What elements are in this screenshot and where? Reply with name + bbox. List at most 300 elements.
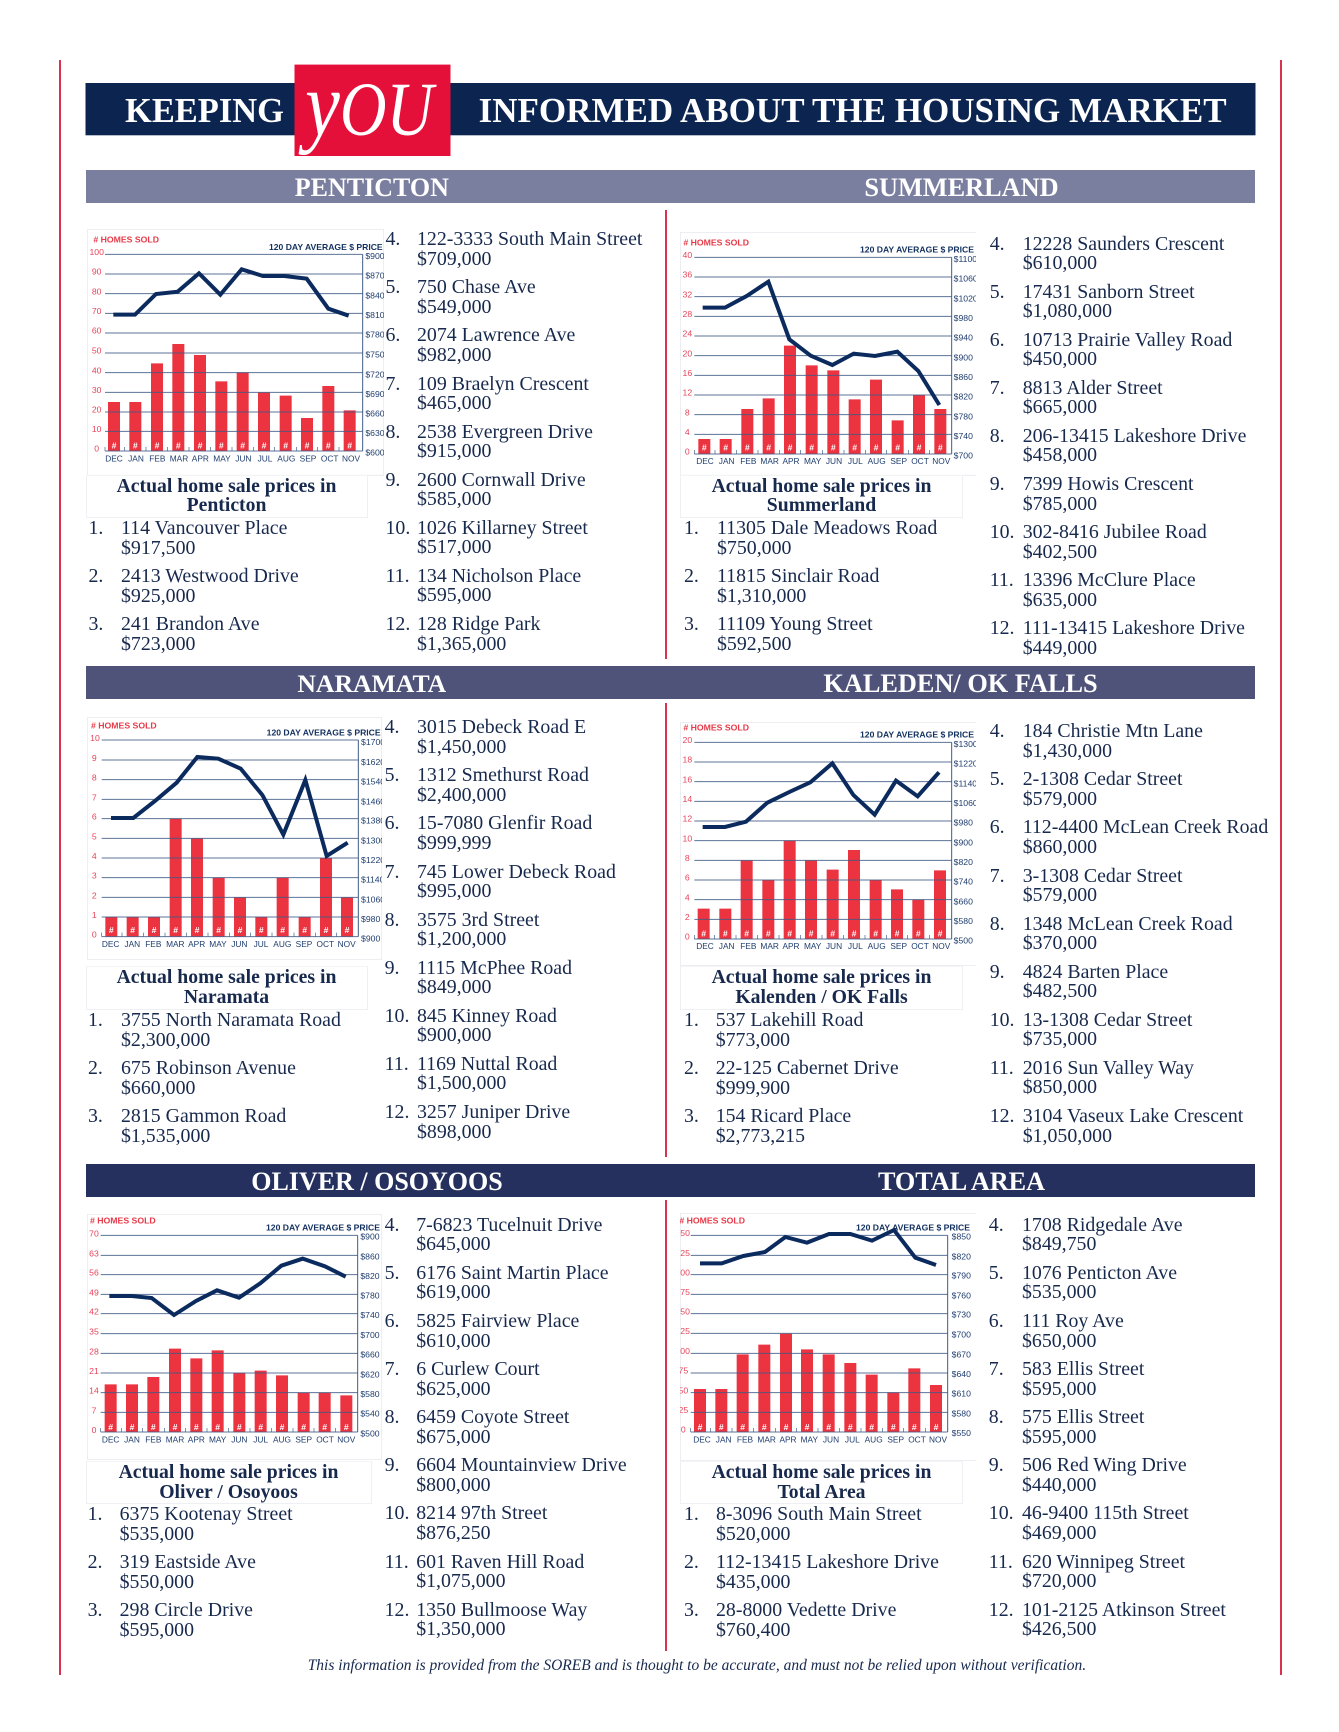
list: Summerland sales 1-3: $750,000 [717, 536, 791, 558]
chart: Penticton homes sold and average price: ############ [112, 441, 352, 451]
list: Naramata sales 4-12: 1312 Smethurst Road [417, 764, 589, 786]
month labels: JUN [826, 456, 842, 466]
subheading: Oliver prices: Oliver / Osoyoos [159, 1481, 298, 1503]
month labels: OCT [321, 453, 338, 463]
chart: Kaleden homes sold and average price [680, 722, 976, 966]
list: Penticton sales 4-12: $549,000 [417, 296, 491, 318]
subheading: Penticton prices: Actual home sale prices in [117, 475, 336, 497]
right axis: average price: $900 [361, 934, 380, 944]
subheading: Summerland prices: Summerland [767, 494, 876, 516]
list: Kaleden sales 4-12: 3-1308 Cedar Street [1023, 865, 1182, 887]
list: Summerland sales 1-3: 2. [684, 565, 699, 587]
left axis: homes sold: 28 [683, 309, 692, 319]
list: Summerland sales 4-12: 302-8416 Jubilee Road [1023, 521, 1207, 543]
list: Kaleden sales 4-12: 112-4400 McLean Creek Road [1023, 816, 1268, 838]
list: Oliver sales 1-3: $595,000 [120, 1619, 194, 1641]
list: Total Area sales 4-12: 111 Roy Ave [1022, 1310, 1124, 1332]
heading: Penticton: PENTICTON [295, 173, 449, 202]
list: Summerland sales 4-12: 5. [990, 281, 1005, 303]
month labels: AUG [277, 453, 295, 463]
bars: homes sold [698, 346, 946, 454]
right axis: average price: $790 [952, 1271, 971, 1281]
left axis: homes sold: 50 [92, 346, 102, 356]
right axis: average price: $580 [954, 916, 973, 926]
list: Summerland sales 4-12: 12. [990, 617, 1014, 639]
list: Oliver sales 4-12: 10. [385, 1502, 409, 1524]
right axis: average price: $610 [952, 1389, 971, 1399]
left axis: homes sold: 0 [681, 1425, 686, 1435]
list: Oliver sales 4-12: 5825 Fairview Place [416, 1310, 579, 1332]
list: Oliver sales 4-12: $1,350,000 [416, 1618, 505, 1640]
list: Summerland sales 4-12: $450,000 [1023, 348, 1097, 370]
list: Kaleden sales 1-3 [684, 1009, 899, 1147]
list: Penticton sales 4-12: 134 Nicholson Place [417, 565, 581, 587]
list: Summerland sales 1-3: 1. [684, 517, 699, 539]
left axis: homes sold: 7 [92, 1405, 97, 1415]
month labels: AUG [868, 456, 886, 466]
list: Summerland sales 1-3: 11815 Sinclair Road [717, 565, 879, 587]
panel: Total Area [680, 1213, 1226, 1641]
list: Naramata sales 4-12: 845 Kinney Road [417, 1005, 557, 1027]
list: Kaleden sales 4-12: 9. [990, 961, 1005, 983]
left axis: homes sold [675, 1228, 690, 1435]
list: Penticton sales 1-3 [88, 517, 299, 655]
right axis: average price: $780 [954, 411, 973, 421]
month labels: SEP [890, 456, 907, 466]
list: Naramata sales 4-12: $995,000 [417, 880, 491, 902]
list: Penticton sales 1-3: $925,000 [121, 585, 195, 607]
right axis: average price: $740 [954, 877, 973, 887]
list: Naramata sales 4-12: $849,000 [417, 976, 491, 998]
left axis: homes sold: 32 [683, 289, 692, 299]
list: Oliver sales 1-3: 1. [88, 1503, 102, 1525]
list: Penticton sales 4-12: 10. [386, 517, 410, 539]
list: Kaleden sales 4-12: $850,000 [1023, 1076, 1097, 1098]
month labels: AUG [865, 1434, 883, 1444]
heading: Total Area: TOTAL AREA [878, 1167, 1045, 1196]
list: Kaleden sales 1-3: 2. [684, 1057, 699, 1079]
chart: Oliver homes sold and average price [87, 1214, 382, 1460]
month labels: SEP [887, 1434, 904, 1444]
list: Summerland sales 4-12: 13396 McClure Place [1023, 569, 1196, 591]
month labels: SEP [295, 1434, 312, 1444]
chart: Penticton homes sold and average price [87, 229, 384, 476]
left axis: homes sold: 20 [683, 735, 692, 745]
bars: homes sold [698, 841, 946, 939]
month labels: MAR [166, 1434, 184, 1444]
month labels: NOV [342, 453, 360, 463]
month labels: JUN [826, 941, 842, 951]
right axis: average price: $700 [360, 1330, 380, 1340]
list: Kaleden sales 4-12: 4. [990, 720, 1005, 742]
left axis: homes sold: 20 [92, 405, 102, 415]
left axis: homes sold: 2 [92, 890, 97, 900]
subheading: Summerland prices [680, 475, 963, 518]
line: 120 day average price [111, 757, 348, 856]
left axis: homes sold: 16 [683, 368, 692, 378]
list: Oliver sales 4-12: $625,000 [416, 1378, 491, 1400]
month labels: JAN [128, 453, 144, 463]
list: Summerland sales 1-3: 11109 Young Street [717, 613, 873, 635]
month labels: JUN [231, 1434, 247, 1444]
list: Penticton sales 4-12: 2600 Cornwall Drive [417, 469, 586, 491]
bars: homes sold [105, 819, 353, 937]
list: Total Area sales 4-12: 10. [989, 1502, 1014, 1524]
left axis: homes sold: 8 [685, 407, 690, 417]
month labels: NOV [929, 1434, 947, 1444]
subheading: Kaleden prices: Kalenden / OK Falls [735, 986, 908, 1008]
axis title: average price: 120 DAY AVERAGE $ PRICE [860, 245, 974, 255]
list: Summerland sales 4-12: 8813 Alder Street [1023, 377, 1163, 399]
list: Naramata sales 4-12: 3575 3rd Street [417, 909, 539, 931]
month labels: NOV [932, 456, 951, 466]
left axis: homes sold: 6 [685, 873, 690, 883]
red rule: left margin [58, 60, 61, 1675]
month labels: APR [188, 1434, 205, 1444]
list: Penticton sales 4-12: 109 Braelyn Crescent [417, 373, 589, 395]
month labels: MAY [801, 1434, 818, 1444]
list: Total Area sales 4-12: $535,000 [1022, 1281, 1096, 1303]
left axis: homes sold: 12 [683, 814, 692, 824]
list: Oliver sales 4-12: 6604 Mountainview Drive [416, 1454, 627, 1476]
list: Oliver sales 4-12: 1350 Bullmoose Way [416, 1599, 587, 1621]
right axis: average price [954, 254, 978, 461]
list: Total Area sales 1-3: $520,000 [716, 1523, 790, 1545]
month labels: MAR [760, 456, 779, 466]
list: Naramata sales 1-3 [88, 1009, 341, 1147]
list: Kaleden sales 4-12: $1,050,000 [1023, 1125, 1112, 1147]
list: Summerland sales 4-12: 8. [990, 425, 1005, 447]
left axis: homes sold: 60 [92, 326, 102, 336]
list: Naramata sales 4-12: 11. [385, 1053, 409, 1075]
list: Summerland sales 4-12: 6. [990, 329, 1005, 351]
axis title: homes sold: # HOMES SOLD [93, 235, 159, 245]
left axis: homes sold: 0 [685, 447, 690, 457]
list: Summerland sales 1-3: $592,500 [717, 633, 791, 655]
month labels: MAY [209, 939, 227, 949]
list: Oliver sales 4-12: 6459 Coyote Street [416, 1406, 569, 1428]
left axis: homes sold [683, 735, 692, 942]
list: Total Area sales 4-12: 1076 Penticton Ave [1022, 1262, 1177, 1284]
list: Total Area sales 4-12: 8. [989, 1406, 1004, 1428]
red rule: right margin [1280, 60, 1282, 1675]
subheading: Oliver prices [86, 1461, 372, 1504]
list: Naramata sales 4-12: 9. [385, 957, 399, 979]
list: Summerland sales 4-12: $402,500 [1023, 541, 1097, 563]
month labels: FEB [149, 453, 166, 463]
month labels: SEP [300, 453, 317, 463]
right axis: average price: $500 [360, 1428, 380, 1438]
panel: Penticton [86, 228, 642, 655]
list: Naramata sales 4-12: 4. [385, 716, 399, 738]
subheading: Naramata prices: Naramata [184, 986, 269, 1008]
month labels: NOV [932, 941, 951, 951]
list: Summerland sales 4-12: $785,000 [1023, 493, 1097, 515]
list: Summerland sales 4-12: $449,000 [1023, 637, 1097, 659]
axis title: average price: 120 DAY AVERAGE $ PRICE [266, 1223, 380, 1233]
right axis: average price: $820 [954, 392, 973, 402]
left axis: homes sold: 0 [92, 930, 97, 940]
list: Kaleden sales 1-3: 154 Ricard Place [716, 1105, 851, 1127]
list: Summerland sales 1-3: 3. [684, 613, 699, 635]
left axis: homes sold: 10 [683, 833, 692, 843]
right axis: average price: $900 [954, 837, 973, 847]
left axis: homes sold: 16 [683, 774, 692, 784]
axis title: average price: 120 DAY AVERAGE $ PRICE [269, 242, 383, 252]
subheading: Penticton prices [86, 475, 368, 518]
month labels [102, 1434, 356, 1444]
line: 120 day average price [700, 1230, 936, 1265]
left axis: homes sold [89, 1228, 99, 1435]
left axis: homes sold: 0 [92, 1425, 97, 1435]
list: Penticton sales 4-12: 8. [386, 421, 400, 443]
list: Summerland sales 4-12: $665,000 [1023, 396, 1097, 418]
left axis: homes sold: 40 [92, 365, 102, 375]
list: Total Area sales 1-3: $760,400 [716, 1619, 790, 1641]
month labels: APR [779, 1434, 797, 1444]
left axis: homes sold: 28 [89, 1346, 99, 1356]
month labels: FEB [740, 456, 757, 466]
left axis: homes sold: 42 [89, 1307, 99, 1317]
list: Penticton sales 1-3: 241 Brandon Ave [121, 613, 260, 635]
list: Summerland sales 4-12 [990, 233, 1246, 659]
chart: Oliver homes sold and average price: ############ [108, 1422, 349, 1432]
month labels: JUN [231, 939, 247, 949]
month labels: JAN [124, 1434, 140, 1444]
month labels: JAN [719, 941, 735, 951]
list: Summerland sales 4-12: 111-13415 Lakeshore Drive [1023, 617, 1245, 639]
left axis: homes sold: 30 [92, 385, 102, 395]
list: Summerland sales 1-3 [684, 517, 938, 655]
list: Total Area sales 4-12: $469,000 [1022, 1522, 1096, 1544]
list: Naramata sales 4-12: 1115 McPhee Road [417, 957, 572, 979]
list: Oliver sales 1-3: 298 Circle Drive [120, 1599, 253, 1621]
list: Summerland sales 4-12: $1,080,000 [1023, 300, 1112, 322]
left axis: homes sold [90, 733, 100, 940]
list: Summerland sales 4-12: 12228 Saunders Crescent [1023, 233, 1224, 255]
list: Summerland sales 4-12: $458,000 [1023, 444, 1097, 466]
list: Penticton sales 1-3: 3. [88, 613, 103, 635]
right axis: average price [952, 1231, 971, 1438]
list: Naramata sales 4-12: 8. [385, 909, 399, 931]
month labels: MAY [804, 456, 822, 466]
month labels: APR [782, 941, 800, 951]
list: Summerland sales 1-3: $1,310,000 [717, 585, 806, 607]
list: Total Area sales 1-3: 28-8000 Vedette Drive [716, 1599, 896, 1621]
list: Kaleden sales 4-12: 184 Christie Mtn Lane [1023, 720, 1203, 742]
left axis: homes sold: 0 [94, 444, 99, 454]
right axis: average price: $580 [952, 1408, 971, 1418]
list: Penticton sales 4-12: 7. [386, 373, 400, 395]
list: Kaleden sales 4-12: 6. [990, 816, 1005, 838]
list: Naramata sales 1-3: $2,300,000 [121, 1029, 210, 1051]
month labels: NOV [337, 1434, 356, 1444]
left axis: homes sold: 10 [92, 424, 102, 434]
right axis: average price: $550 [952, 1428, 971, 1438]
subheading: Naramata prices: Actual home sale prices in [117, 966, 336, 988]
left axis: homes sold: 24 [683, 329, 692, 339]
list: Naramata sales 4-12: 12. [385, 1101, 409, 1123]
month labels: DEC [696, 456, 714, 466]
subheading: Total Area prices: Actual home sale prices in [712, 1461, 931, 1483]
list: Oliver sales 4-12: 7-6823 Tucelnuit Drive [416, 1214, 602, 1236]
left axis: homes sold: 1 [92, 910, 97, 920]
left axis: homes sold: 49 [89, 1287, 99, 1297]
list: Penticton sales 4-12: 128 Ridge Park [417, 613, 540, 635]
list: Penticton sales 4-12: $1,365,000 [417, 633, 506, 655]
list: Penticton sales 4-12: 2538 Evergreen Drive [417, 421, 593, 443]
left axis: homes sold: 5 [92, 831, 97, 841]
list: Total Area sales 4-12: 7. [989, 1358, 1004, 1380]
left axis: homes sold: 0 [685, 932, 690, 942]
list: Kaleden sales 4-12: $579,000 [1023, 884, 1097, 906]
list: Total Area sales 4-12: 9. [989, 1454, 1004, 1476]
month labels: DEC [693, 1434, 711, 1444]
red divider: row 3 [665, 1200, 667, 1651]
right axis: average price [361, 737, 385, 944]
month labels: OCT [317, 939, 334, 949]
list: Oliver sales 4-12: $1,075,000 [416, 1570, 505, 1592]
list: Kaleden sales 1-3: 3. [684, 1105, 699, 1127]
list: Oliver sales 4-12: 12. [385, 1599, 409, 1621]
subheading: Total Area prices [680, 1461, 963, 1504]
left axis: homes sold: 20 [683, 348, 692, 358]
list: Total Area sales 4-12: $440,000 [1022, 1474, 1096, 1496]
line: 120 day average price [703, 282, 939, 405]
list: Penticton sales 4-12: $465,000 [417, 392, 491, 414]
month labels: APR [192, 453, 209, 463]
month labels: JUL [253, 1434, 268, 1444]
list: Penticton sales 1-3: $917,500 [121, 536, 195, 558]
list: Naramata sales 4-12 [385, 716, 616, 1143]
list: Oliver sales 1-3: 6375 Kootenay Street [120, 1503, 293, 1525]
month labels: SEP [890, 941, 907, 951]
right axis: average price: $980 [954, 313, 973, 323]
right axis: average price: $760 [952, 1290, 971, 1300]
right axis: average price: $540 [360, 1409, 380, 1419]
right axis: average price: $730 [952, 1310, 971, 1320]
heading: Kaleden / OK Falls: KALEDEN/ OK FALLS [823, 669, 1098, 698]
month labels: MAR [170, 453, 188, 463]
axis title: homes sold: # HOMES SOLD [90, 1216, 156, 1226]
bars: homes sold [105, 1349, 352, 1432]
list: Naramata sales 1-3: 2815 Gammon Road [121, 1105, 286, 1127]
list: Total Area sales 4-12: $426,500 [1022, 1618, 1096, 1640]
list: Kaleden sales 4-12: $860,000 [1023, 836, 1097, 858]
left axis: homes sold: 40 [683, 250, 692, 260]
list: Total Area sales 4-12: 6. [989, 1310, 1004, 1332]
month labels: AUG [273, 939, 291, 949]
list: Penticton sales 1-3: $723,000 [121, 633, 195, 655]
left axis: homes sold: 8 [685, 853, 690, 863]
left axis: homes sold: 56 [89, 1268, 99, 1278]
list: Penticton sales 4-12 [386, 228, 642, 655]
month labels: JUL [848, 456, 863, 466]
list: Summerland sales 4-12: 10713 Prairie Valley Road [1023, 329, 1232, 351]
list: Oliver sales 1-3: $550,000 [120, 1571, 194, 1593]
list: Oliver sales 4-12: 11. [385, 1551, 409, 1573]
list: Penticton sales 1-3: 1. [88, 517, 103, 539]
list: Naramata sales 4-12: $898,000 [417, 1121, 491, 1143]
list: Naramata sales 1-3: 3755 North Naramata Road [121, 1009, 341, 1031]
month labels: OCT [911, 941, 929, 951]
list: Naramata sales 4-12: 3257 Juniper Drive [417, 1101, 570, 1123]
list: Oliver sales 1-3: 2. [88, 1551, 102, 1573]
list: Oliver sales 1-3 [88, 1503, 293, 1641]
list: Penticton sales 4-12: 12. [386, 613, 410, 635]
right axis: average price: $660 [360, 1350, 380, 1360]
list: Kaleden sales 4-12: 10. [990, 1009, 1014, 1031]
list: Total Area sales 4-12: 11. [989, 1551, 1013, 1573]
right axis: average price: $740 [360, 1310, 380, 1320]
section bar: Oliver and Total Area [86, 1164, 1255, 1197]
list: Total Area sales 1-3: 8-3096 South Main Street [716, 1503, 922, 1525]
left axis: homes sold: 4 [685, 427, 690, 437]
line: 120 day average price [703, 763, 939, 827]
chart: Summerland homes sold and average price: ############ [702, 442, 943, 452]
list: Naramata sales 4-12: 5. [385, 764, 399, 786]
list: Penticton sales 4-12: 6. [386, 324, 400, 346]
list: Oliver sales 4-12: $645,000 [416, 1233, 491, 1255]
list: Oliver sales 4-12: $675,000 [416, 1426, 491, 1448]
list: Naramata sales 1-3: $660,000 [121, 1077, 195, 1099]
list: Kaleden sales 4-12: $482,500 [1023, 980, 1097, 1002]
month labels: JAN [716, 1434, 732, 1444]
month labels: JUL [845, 1434, 860, 1444]
list: Naramata sales 4-12: 3015 Debeck Road E [417, 716, 586, 738]
list: Penticton sales 4-12: 122-3333 South Main Street [417, 228, 642, 250]
left axis: homes sold: 6 [92, 812, 97, 822]
list: Penticton sales 4-12: 4. [386, 228, 400, 250]
right axis: average price: $820 [952, 1251, 971, 1261]
subheading: Oliver prices: Actual home sale prices in [119, 1461, 338, 1483]
list: Naramata sales 4-12: 10. [385, 1005, 409, 1027]
right axis: average price: $850 [952, 1231, 971, 1241]
month labels: FEB [145, 939, 162, 949]
month labels: JUL [258, 453, 273, 463]
axis title: average price: 120 DAY AVERAGE $ PRICE [860, 730, 974, 740]
left axis: homes sold: 21 [89, 1366, 99, 1376]
month labels: APR [188, 939, 205, 949]
list: Penticton sales 4-12: 11. [386, 565, 410, 587]
right axis: average price: $900 [954, 352, 973, 362]
title banner [86, 64, 1256, 156]
right axis: average price: $820 [954, 857, 973, 867]
list: Oliver sales 4-12: 9. [385, 1454, 399, 1476]
left axis: homes sold: 12 [683, 388, 692, 398]
left axis: homes sold: 8 [92, 773, 97, 783]
right axis: average price: $670 [952, 1349, 971, 1359]
month labels: OCT [911, 456, 929, 466]
right axis: average price: $820 [360, 1271, 380, 1281]
right axis: average price: $660 [954, 896, 973, 906]
subheading: Penticton prices: Penticton [187, 494, 266, 516]
panel: Oliver / Osoyoos [86, 1214, 627, 1641]
axis title: average price: 120 DAY AVERAGE $ PRICE [856, 1223, 970, 1233]
panel: Kaleden / OK Falls [680, 720, 1268, 1147]
right axis: average price [360, 1232, 380, 1438]
list: Kaleden sales 4-12: 13-1308 Cedar Street [1023, 1009, 1192, 1031]
right axis: average price: $780 [360, 1291, 380, 1301]
month labels [102, 939, 356, 949]
list: Kaleden sales 4-12: $1,430,000 [1023, 740, 1112, 762]
list: Summerland sales 4-12: 11. [990, 569, 1014, 591]
left axis: homes sold: 4 [685, 892, 690, 902]
list: Naramata sales 4-12: $2,400,000 [417, 784, 506, 806]
list: Oliver sales 1-3: $535,000 [120, 1523, 194, 1545]
left axis: homes sold: 36 [683, 270, 692, 280]
subheading: Naramata prices [86, 966, 368, 1010]
